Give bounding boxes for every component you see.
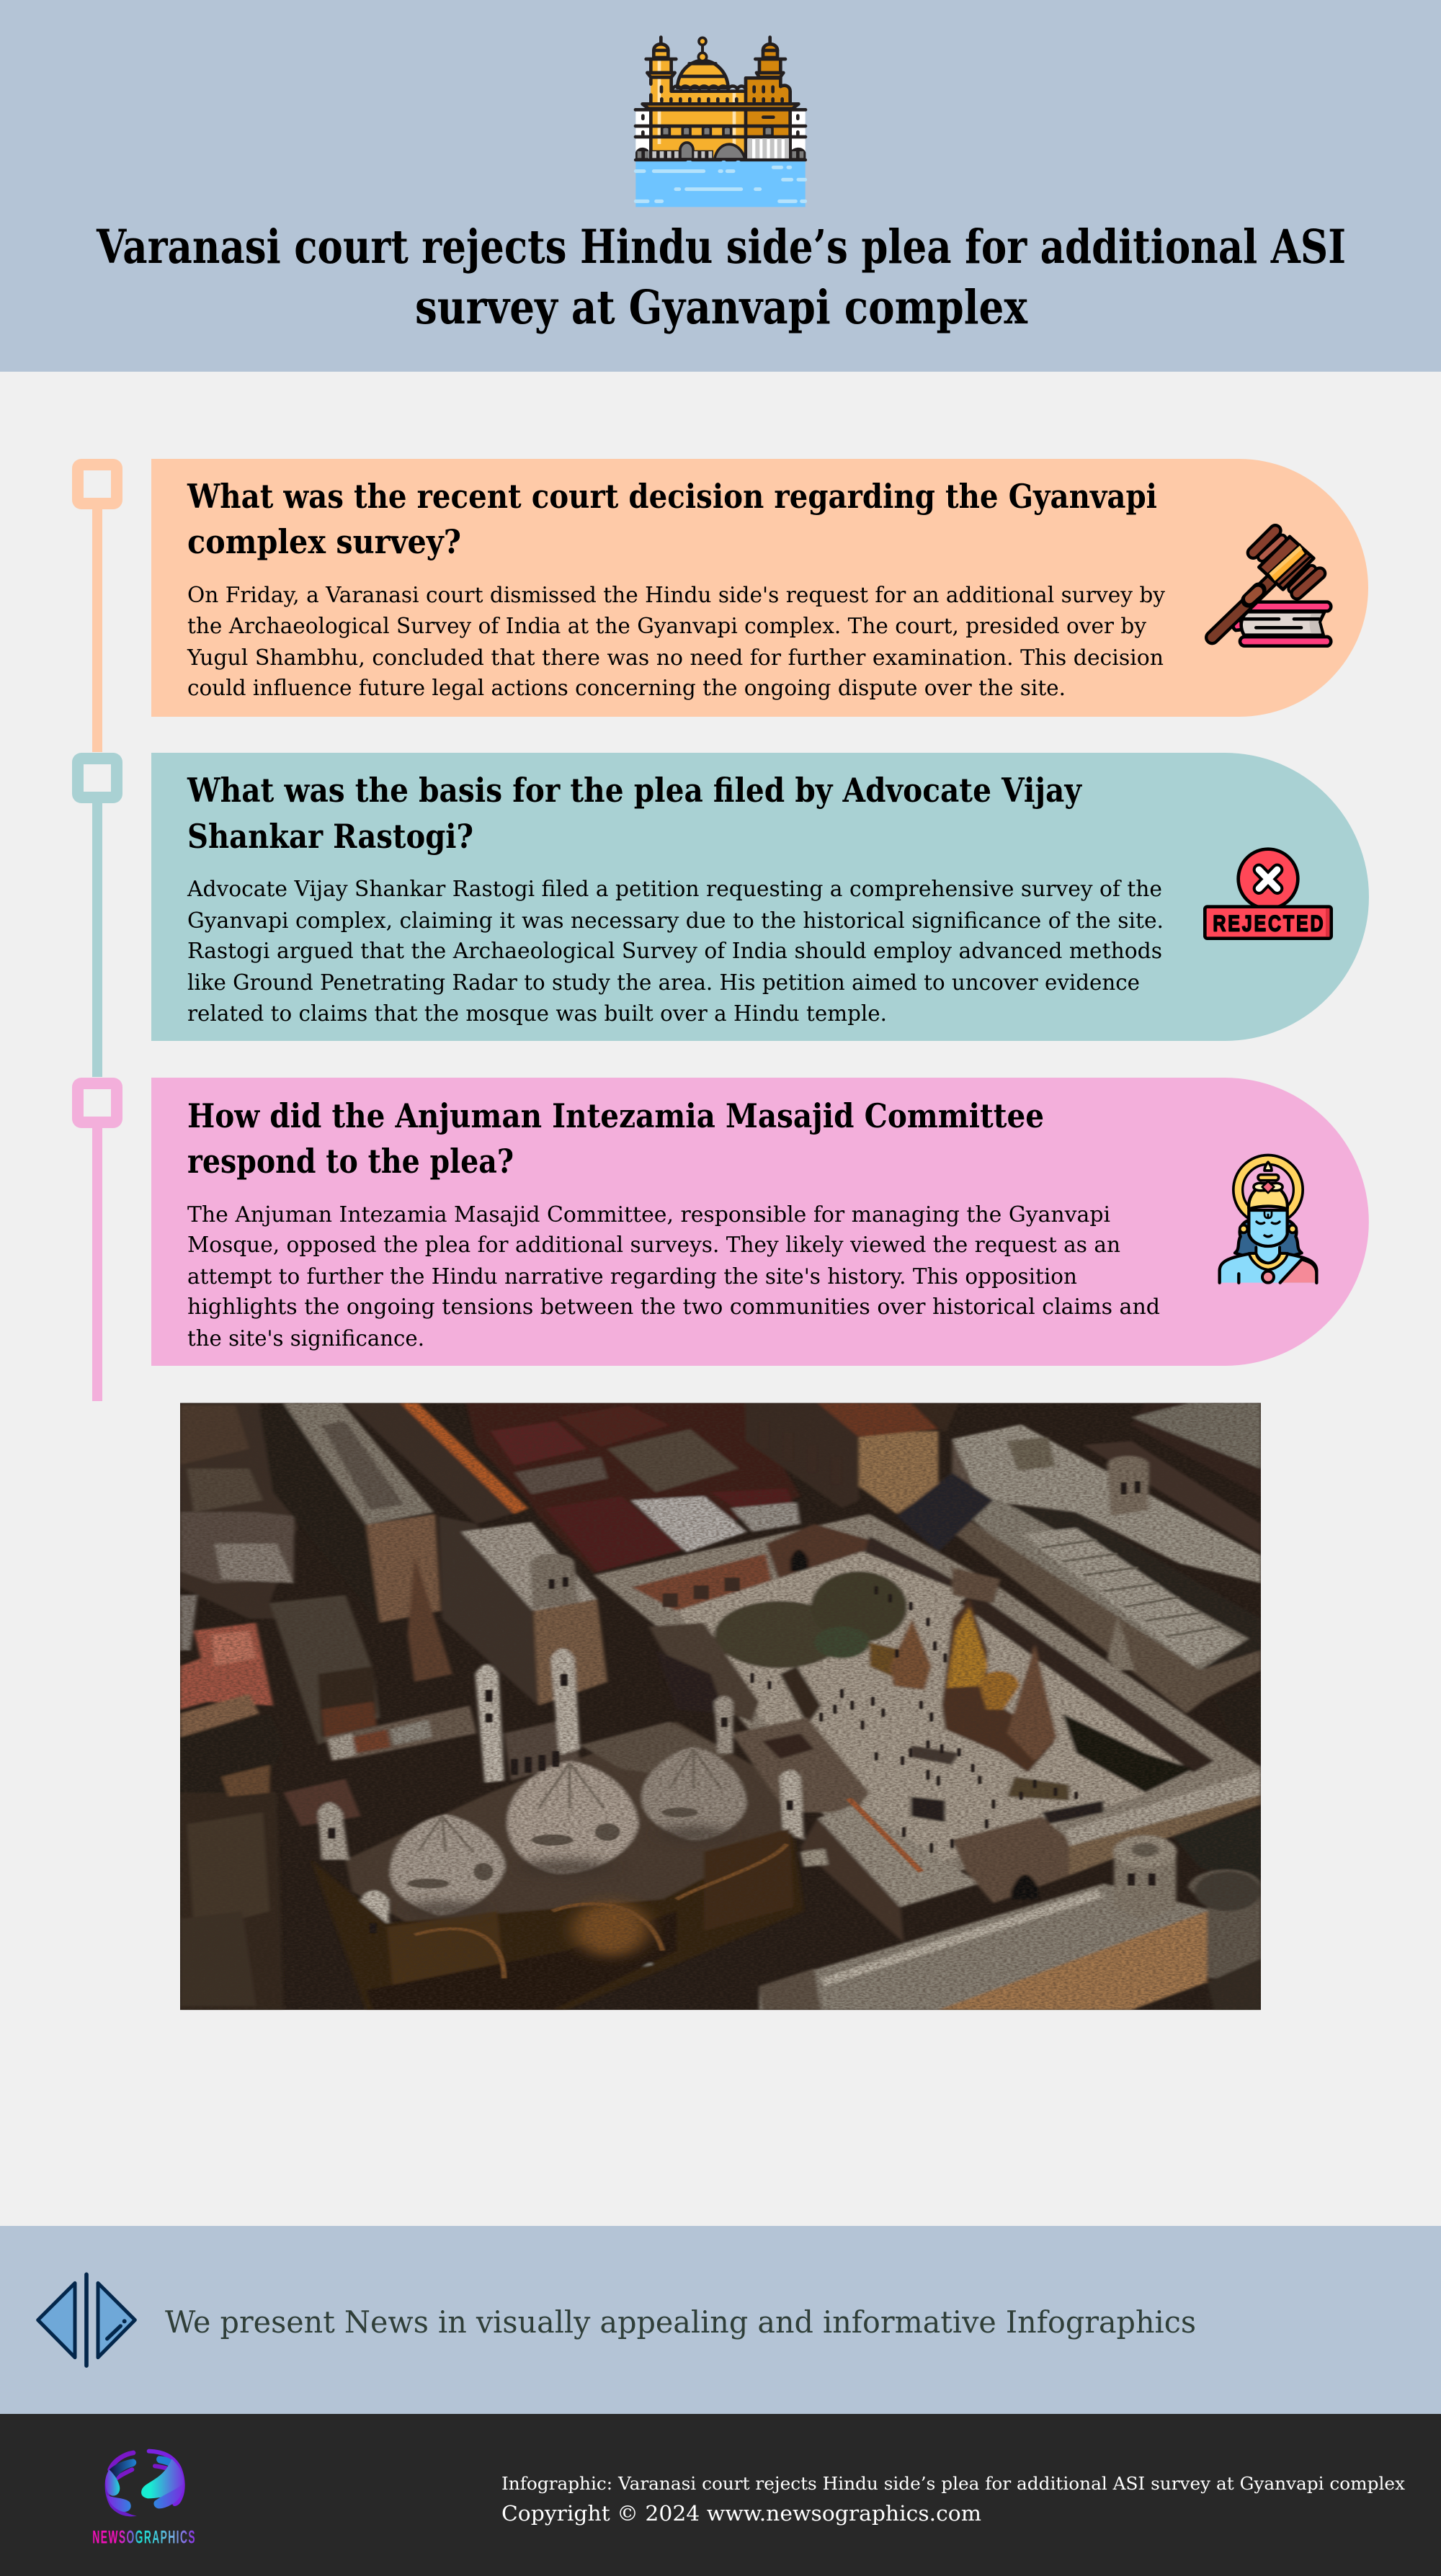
panel: basis for plea	[151, 753, 1369, 1041]
text: court decision	[187, 583, 1165, 701]
heading: basis for plea: Shankar Rastogi?	[187, 817, 473, 856]
timeline marker 1	[72, 459, 122, 752]
timeline marker 2	[72, 753, 122, 1077]
text: court decision: On Friday, a Varanasi court dismissed the Hindu side's request for an additional survey by	[187, 583, 1165, 608]
heading: court decision	[187, 477, 1157, 561]
header band	[0, 0, 1441, 372]
text: basis for plea: Advocate Vijay Shankar Rastogi filed a petition requesting a comprehensive survey of the	[187, 877, 1162, 902]
text: court decision: the Archaeological Survey of India at the Gyanvapi complex. The court, presided over by	[187, 614, 1146, 639]
warm glow on facade	[573, 1901, 649, 1956]
text: committee response: highlights the ongoing tensions between the two communities over historical claims and	[187, 1294, 1160, 1320]
panel: committee response	[151, 1078, 1369, 1366]
icon: mirror triangles	[38, 2274, 135, 2366]
title	[96, 220, 1346, 335]
photo: aerial view of Gyanvapi complex	[180, 1403, 1261, 2010]
heading: court decision: What was the recent court decision regarding the Gyanvapi	[187, 477, 1157, 516]
photo grain	[180, 1403, 1261, 2010]
dome shading	[404, 1826, 731, 1917]
text: basis for plea: like Ground Penetrating Radar to study the area. His petition aimed to uncover evidence	[187, 970, 1140, 996]
text: basis for plea	[187, 877, 1164, 1027]
heading: basis for plea	[187, 771, 1082, 856]
dome ribs and stains	[418, 1749, 721, 1852]
courtyard people	[752, 1587, 1076, 1852]
icon: rejected stamp	[1205, 849, 1331, 939]
footer band	[0, 2414, 1441, 2576]
text: committee response: the site's significance.	[187, 1326, 424, 1351]
wall ledge	[849, 1799, 921, 1871]
text: committee response: attempt to further the Hindu narrative regarding the site's history. This opposition	[187, 1264, 1077, 1289]
text: committee response: Mosque, opposed the plea for additional surveys. They likely viewed the request as an	[187, 1233, 1120, 1258]
wall ornament	[414, 1844, 787, 1978]
logo: Newsographics	[92, 2451, 195, 2548]
title: survey at Gyanvapi complex	[415, 280, 1028, 335]
footer credits: Infographic: Varanasi court rejects Hindu side’s plea for additional ASI survey at Gyanvapi complex	[501, 2474, 1405, 2494]
text: court decision: Yugul Shambhu, concluded that there was no need for further examination. This decision	[187, 645, 1164, 671]
text: court decision: could influence future legal actions concerning the ongoing dispute over the site.	[187, 676, 1066, 701]
photo fine detail	[327, 1481, 1221, 1979]
icon: rejected stamp: REJECTED	[1213, 911, 1324, 936]
heading: basis for plea: What was the basis for the plea filed by Advocate Vijay	[187, 771, 1082, 810]
text: basis for plea: Gyanvapi complex, claiming it was necessary due to the historical significance of the site.	[187, 908, 1164, 934]
bottom tagline band	[0, 2226, 1441, 2414]
roof ribs	[1042, 1539, 1221, 1637]
heading: committee response	[187, 1096, 1044, 1181]
icon: deity	[1220, 1155, 1316, 1283]
text: basis for plea: related to claims that the mosque was built over a Hindu temple.	[187, 1001, 887, 1027]
heading: committee response: How did the Anjuman Intezamia Masajid Committee	[187, 1096, 1044, 1135]
footer credits: Copyright © 2024 www.newsographics.com	[501, 2501, 981, 2526]
heading: court decision: complex survey?	[187, 522, 461, 561]
timeline marker 3	[72, 1078, 122, 1401]
text: committee response: The Anjuman Intezamia Masajid Committee, responsible for managing the Gyanvapi	[187, 1202, 1110, 1227]
tagline: We present News in visually appealing and informative Infographics	[165, 2304, 1196, 2340]
icon: golden temple	[635, 37, 806, 207]
panel: court decision	[151, 459, 1368, 717]
text: committee response	[187, 1202, 1160, 1351]
heading: committee response: respond to the plea?	[187, 1142, 514, 1181]
icon: gavel and book	[1212, 531, 1331, 646]
logo: Newsographics: NEWSOGRAPHICS	[92, 2528, 195, 2548]
text: basis for plea: Rastogi argued that the Archaeological Survey of India should employ advanced methods	[187, 939, 1162, 964]
footer credits	[501, 2474, 1405, 2526]
windows and arches	[329, 1481, 1156, 1933]
